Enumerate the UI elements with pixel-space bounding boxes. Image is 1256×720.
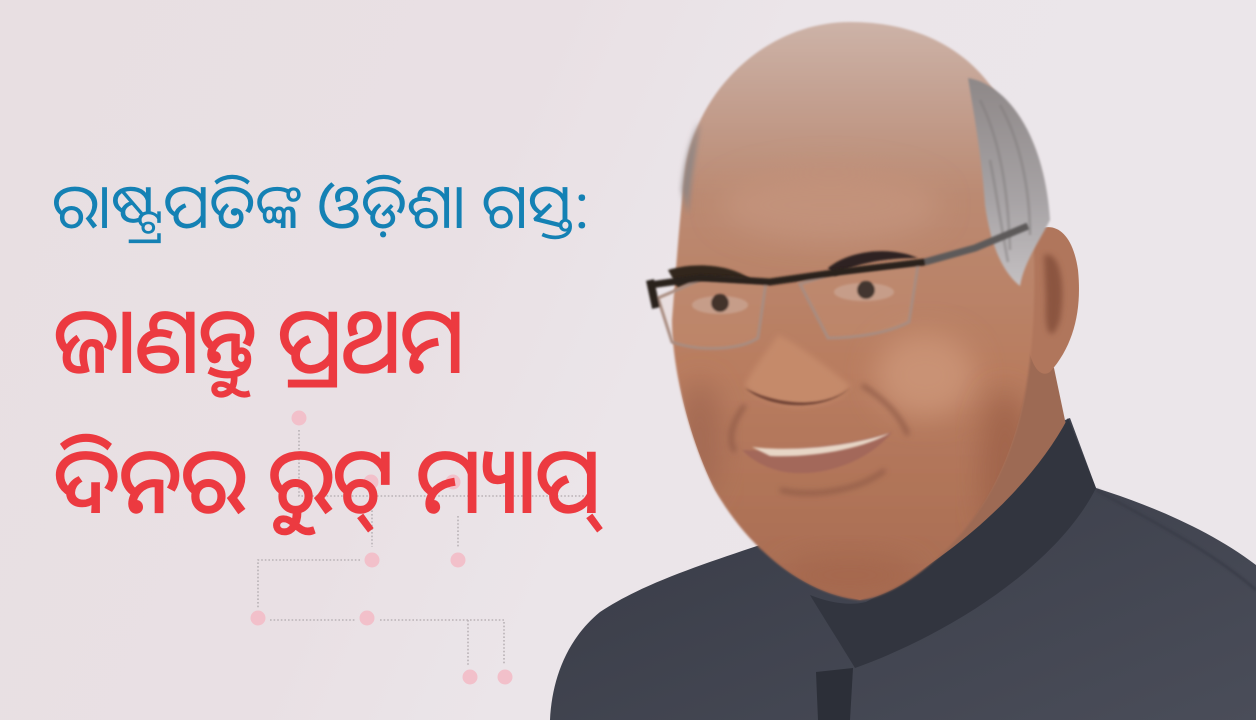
collar opening (816, 668, 853, 720)
face highlights and shadows (678, 169, 1030, 595)
grey hair (968, 78, 1050, 286)
heading: red line two: ଦିନର ରୁଟ୍ ମ୍ୟାପ୍ (54, 417, 600, 539)
route map decoration (250, 410, 595, 684)
neck (745, 320, 1066, 600)
head and face (672, 22, 1034, 600)
ear (1026, 227, 1079, 374)
mandarin collar (810, 418, 1096, 668)
glasses (650, 226, 1028, 348)
eyes (692, 281, 894, 314)
mouth and smile (742, 432, 892, 473)
nose (745, 335, 850, 406)
eyebrows (668, 265, 752, 288)
shoulder seam (1096, 490, 1256, 590)
heading: red line one: ଜାଣନ୍ତୁ ପ୍ରଥମ (54, 277, 464, 399)
heading: blue line: ରାଷ୍ଟ୍ରପତିଙ୍କ ଓଡ଼ିଶା ଗସ୍ତ: (52, 163, 590, 247)
facial creases (731, 385, 908, 493)
jacket (550, 418, 1256, 720)
portrait photo (550, 22, 1256, 720)
